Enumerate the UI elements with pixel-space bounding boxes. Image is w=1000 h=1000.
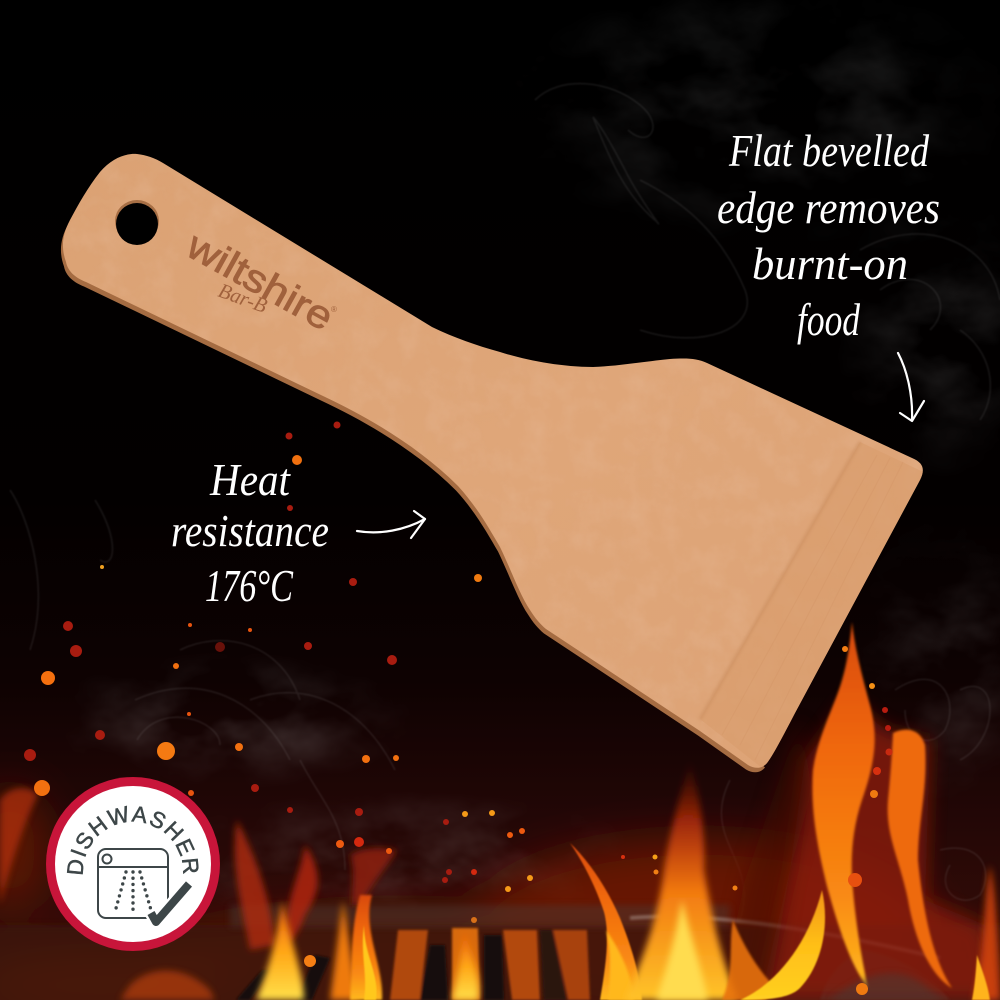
arrow: bevelled edge: [898, 353, 924, 421]
embers: [24, 422, 892, 995]
flame: left edge: [0, 788, 38, 905]
badge: dishwasher: [46, 777, 220, 951]
callout: flat bevelled edge: [717, 125, 940, 345]
logo: wiltshire: wiltshire: [179, 224, 340, 339]
flame: yellow crescent: [740, 890, 825, 1000]
spatula: [50, 140, 940, 790]
callout: heat resistance: 176°C: [205, 560, 294, 611]
flame: thin curved flame: [570, 843, 642, 1000]
spatula mottled texture: [102, 167, 923, 766]
flame: mid orange column: [330, 900, 358, 1000]
flame: second right flame: [888, 730, 952, 988]
flame: smoke veil over flame base: [830, 973, 945, 1000]
callout: flat bevelled edge: food: [797, 294, 861, 345]
spatula edge thickness: [61, 158, 765, 772]
flame: left yellow column: [256, 900, 304, 1000]
callout: flat bevelled edge: burnt-on: [752, 238, 908, 289]
badge text: DISHWASHER: [66, 806, 199, 874]
fire glow: [0, 790, 930, 1000]
arrow: heat resistance: [357, 511, 425, 538]
callout: flat bevelled edge: edge removes: [717, 182, 940, 233]
spatula face: [63, 154, 923, 768]
callout: flat bevelled edge: Flat bevelled: [728, 125, 930, 176]
flame: sweep toward crescent: [722, 920, 778, 1000]
grill grate: [0, 905, 1000, 1000]
flame: centre column: [625, 760, 738, 1000]
flame: red haze behind right flames: [760, 700, 1000, 1000]
callout: heat resistance: [171, 454, 329, 611]
callout: heat resistance: resistance: [171, 505, 329, 556]
flames: [0, 622, 1000, 1000]
flame: tall right flame: [812, 622, 875, 988]
logo: wiltshire: ®: [331, 305, 337, 314]
callout: heat resistance: Heat: [209, 454, 291, 505]
bevelled edge: [702, 442, 923, 766]
flame: far right: [973, 865, 1000, 1000]
flame: grate flame: [452, 930, 479, 1000]
logo: wiltshire: Bar-B: [215, 278, 271, 318]
icon: dishwasher: [98, 849, 189, 922]
flame: slim left flame: [350, 895, 382, 1000]
hanging hole: [115, 200, 159, 245]
flame: far-left base: [120, 971, 215, 1000]
flame: small left red flames: [235, 820, 397, 950]
